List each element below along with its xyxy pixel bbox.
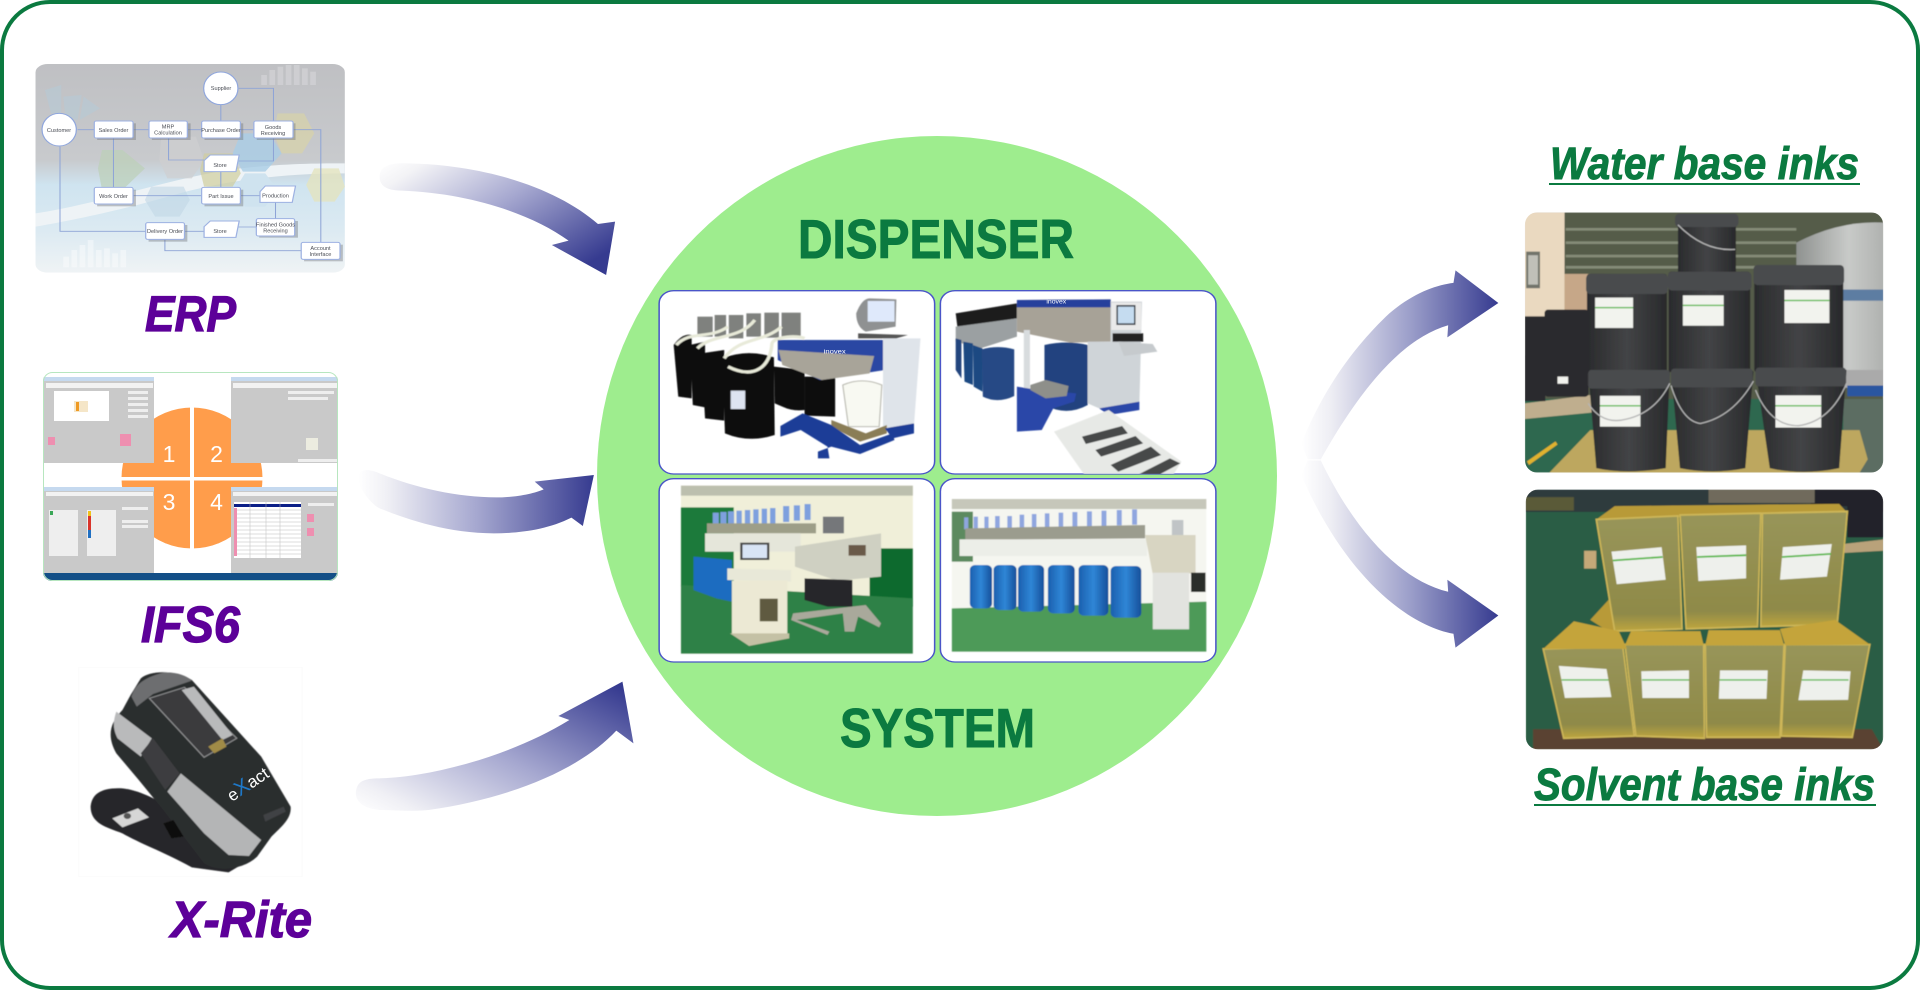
flowchart labels: Work Order xyxy=(99,194,128,200)
panel: dispenser system circle xyxy=(597,136,1277,816)
window 2 xyxy=(231,377,338,463)
flowchart labels: Part Issue xyxy=(208,194,234,200)
icon: X-Rite spectrophotometer xyxy=(79,667,302,877)
window 3 xyxy=(43,487,154,573)
arrow: dispenser to solvent base inks xyxy=(1301,461,1498,648)
photo: solvent base ink cans xyxy=(1526,490,1883,749)
step numbers: 3 xyxy=(163,489,175,515)
photo: water base ink buckets xyxy=(1525,212,1883,473)
flowchart labels: Goods xyxy=(265,125,281,131)
photo: dispenser with ramp: inovex xyxy=(1046,299,1067,305)
arrow: ERP to dispenser xyxy=(380,163,615,275)
photo: dispenser with ramp xyxy=(940,291,1216,474)
heading: Solvent base inks: Solvent base inks xyxy=(1534,759,1875,810)
flowchart labels: Finished Goods xyxy=(256,222,295,228)
label: IFS6: IFS6 xyxy=(141,596,241,653)
flowchart labels: Customer xyxy=(47,128,71,134)
flowchart labels: Sales Order xyxy=(99,128,129,134)
flowchart labels: MRP xyxy=(162,124,174,130)
flowchart labels: Store xyxy=(213,163,227,169)
flowchart labels: Account xyxy=(310,246,331,252)
window 1 xyxy=(43,377,154,463)
panel: ERP flowchart xyxy=(36,64,345,273)
panel: IFS6 software screens xyxy=(43,372,338,581)
machine photo grid xyxy=(659,291,1216,662)
step numbers: 1 xyxy=(163,441,175,467)
flowchart labels: Receiving xyxy=(261,131,285,137)
flowchart labels: Receiving xyxy=(263,228,288,234)
flowchart labels: Purchase Order xyxy=(201,128,241,134)
photo: dispenser in green room xyxy=(659,479,935,662)
flowchart labels: Supplier xyxy=(211,86,231,92)
arrow: X-Rite to dispenser xyxy=(356,682,633,811)
flowchart labels: Delivery Order xyxy=(147,229,183,235)
photo: dispenser with black drums xyxy=(659,291,935,474)
label: ERP: ERP xyxy=(145,286,237,342)
step numbers xyxy=(163,441,223,515)
arrow: IFS6 to dispenser xyxy=(358,470,594,533)
label: X-Rite: X-Rite xyxy=(168,891,312,948)
heading: SYSTEM: SYSTEM xyxy=(840,697,1035,759)
step numbers: 2 xyxy=(210,441,223,467)
flowchart labels xyxy=(47,86,331,258)
flowchart labels: Store xyxy=(213,229,227,235)
arrow: dispenser to water base inks xyxy=(1301,270,1498,459)
flowchart labels: Calculation xyxy=(154,130,182,136)
photo: dispenser with black drums: inovex xyxy=(824,348,846,355)
eXact logo text: eXact xyxy=(222,761,273,806)
flowchart labels: Interface xyxy=(310,252,331,258)
heading: Water base inks: Water base inks xyxy=(1550,138,1859,189)
flowchart labels: Production xyxy=(262,194,289,200)
heading: DISPENSER: DISPENSER xyxy=(798,208,1074,270)
step numbers: 4 xyxy=(210,489,223,515)
photo: dispenser with blue drums xyxy=(940,479,1216,662)
window 4 xyxy=(231,487,338,573)
